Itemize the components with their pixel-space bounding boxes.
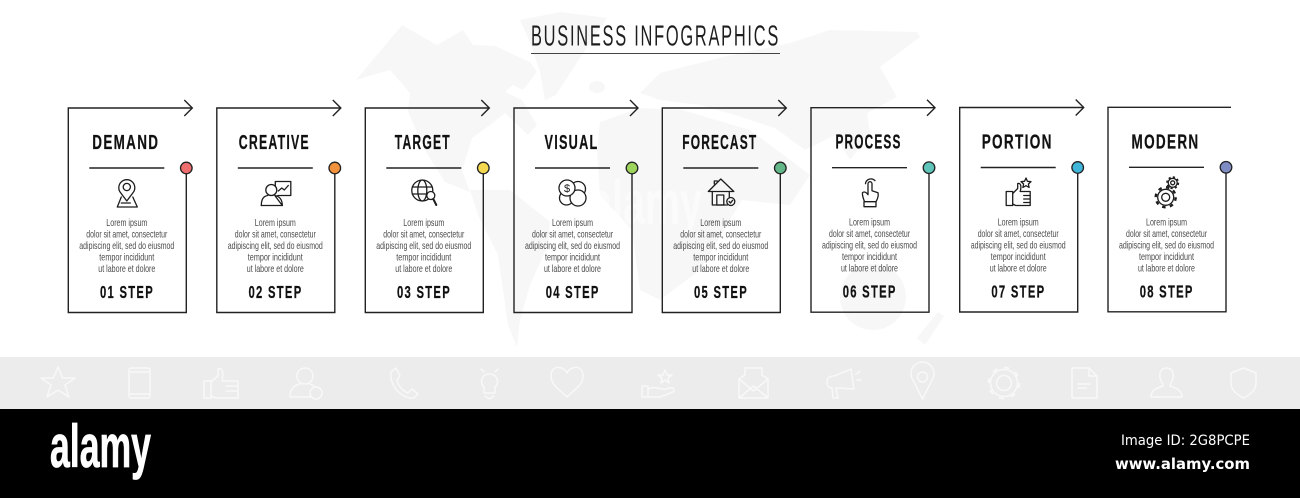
logo: alamy bbox=[50, 413, 151, 480]
panel: step 7 portion: dolor sit amet, consectetur bbox=[978, 228, 1059, 240]
panel: step 8 modern: dolor sit amet, consectetur bbox=[1126, 228, 1207, 240]
panel: step 7 portion: PORTION bbox=[982, 130, 1053, 154]
icon: house bbox=[708, 179, 735, 206]
panel: step 8 modern bbox=[1108, 107, 1232, 312]
panel: step 5 forecast bbox=[662, 100, 786, 312]
panel: step 4 visual: VISUAL bbox=[544, 131, 598, 154]
panel: step 6 process: tempor incididunt bbox=[842, 251, 897, 263]
icon: thumbs up bbox=[204, 369, 238, 398]
panel: step 3 target: ut labore et dolore bbox=[395, 263, 452, 275]
icon: document bbox=[1072, 368, 1097, 398]
panel: step 3 target: dolor sit amet, consectetur bbox=[383, 228, 465, 240]
panel: step 8 modern: tempor incididunt bbox=[1139, 251, 1194, 263]
panel: step 7 portion: 07 STEP bbox=[991, 282, 1045, 302]
panel: step 3 target: Lorem ipsum bbox=[403, 217, 444, 229]
panel: step 2 creative: adipiscing elit, sed do eiusmod bbox=[228, 240, 323, 252]
panel: step 4 visual: adipiscing elit, sed do eiusmod bbox=[525, 240, 620, 252]
panel: step 5 forecast: adipiscing elit, sed do eiusmod bbox=[673, 240, 768, 252]
icon: smartphone bbox=[129, 368, 150, 398]
icon: light bulb bbox=[481, 369, 498, 399]
image id: Image ID: 2G8PCPE bbox=[1121, 433, 1250, 449]
panel: step 2 creative: dolor sit amet, consectetur bbox=[235, 228, 316, 240]
panel: step 1 demand bbox=[68, 100, 192, 312]
icon: telephone bbox=[391, 368, 418, 398]
icon: gears bbox=[1156, 177, 1178, 207]
website: www.alamy.com bbox=[1115, 455, 1250, 473]
icon: location pin bbox=[911, 362, 934, 399]
panel: step 6 process bbox=[811, 100, 935, 312]
panel: step 7 portion: Lorem ipsum bbox=[998, 216, 1039, 228]
panel: step 5 forecast: tempor incididunt bbox=[693, 252, 748, 264]
panel: step 1 demand: DEMAND bbox=[92, 131, 159, 154]
panel: step 1 demand: adipiscing elit, sed do eiusmod bbox=[79, 240, 174, 252]
icon: shield bbox=[1231, 368, 1256, 398]
icon: hand with star bbox=[642, 370, 674, 397]
panel: step 8 modern: ut labore et dolore bbox=[1138, 262, 1195, 274]
panel: step 7 portion: tempor incididunt bbox=[991, 251, 1046, 263]
panel: step 8 modern: adipiscing elit, sed do eiusmod bbox=[1119, 239, 1214, 251]
background world map bbox=[356, 12, 944, 347]
panel: step 3 target: TARGET bbox=[395, 131, 451, 154]
panel: step 7 portion: ut labore et dolore bbox=[990, 262, 1047, 274]
icon: pin hole bbox=[918, 372, 928, 382]
panel: step 5 forecast: FORECAST bbox=[682, 131, 757, 154]
panel: step 4 visual: dolor sit amet, consectetur bbox=[532, 228, 613, 240]
panel: step 2 creative: Lorem ipsum bbox=[255, 217, 296, 229]
panel: step 3 target bbox=[365, 100, 489, 312]
title: BUSINESS INFOGRAPHICS bbox=[531, 20, 780, 52]
panel: step 6 process: ut labore et dolore bbox=[841, 263, 898, 275]
icon: coins bbox=[559, 180, 586, 206]
icon: envelope bbox=[739, 368, 768, 398]
panel: step 3 target: 03 STEP bbox=[397, 282, 451, 302]
panel: step 6 process: PROCESS bbox=[836, 131, 902, 154]
panel: step 5 forecast: ut labore et dolore bbox=[692, 263, 749, 275]
icon: heart bbox=[551, 367, 583, 397]
panel: step 5 forecast: dolor sit amet, consectetur bbox=[680, 228, 762, 240]
icon strip bbox=[0, 357, 1300, 409]
icon: touch hand bbox=[862, 179, 878, 207]
icon: map pin bbox=[117, 180, 137, 207]
panel: step 6 process: Lorem ipsum bbox=[849, 217, 890, 229]
panel: step 7 portion: adipiscing elit, sed do eiusmod bbox=[971, 240, 1066, 252]
panel: step 3 target: adipiscing elit, sed do eiusmod bbox=[376, 240, 471, 252]
icon: presenter with chart bbox=[261, 182, 291, 206]
panel: step 6 process: adipiscing elit, sed do eiusmod bbox=[822, 240, 917, 252]
panel: step 2 creative: 02 STEP bbox=[249, 282, 303, 302]
icon: coins: $ bbox=[564, 183, 570, 195]
panel: step 8 modern: 08 STEP bbox=[1140, 281, 1194, 301]
panel: step 2 creative: ut labore et dolore bbox=[247, 263, 304, 275]
panel: step 4 visual: Lorem ipsum bbox=[552, 217, 593, 229]
panel: step 6 process: dolor sit amet, consectetur bbox=[829, 228, 910, 240]
icon: globe search bbox=[412, 180, 436, 205]
panel: step 2 creative bbox=[217, 100, 341, 312]
icon: megaphone bbox=[827, 369, 861, 398]
panel: step 5 forecast: Lorem ipsum bbox=[700, 217, 741, 229]
icon: user badge bbox=[310, 387, 322, 399]
panel: step 1 demand: 01 STEP bbox=[100, 282, 154, 302]
panel: step 4 visual: 04 STEP bbox=[546, 282, 600, 302]
panel: step 4 visual bbox=[514, 100, 638, 312]
icon: gear bbox=[988, 368, 1020, 398]
panel: step 5 forecast: 05 STEP bbox=[694, 282, 748, 302]
panel: step 8 modern: MODERN bbox=[1132, 130, 1200, 153]
panel: step 1 demand: ut labore et dolore bbox=[98, 263, 155, 275]
panel: step 4 visual: ut labore et dolore bbox=[544, 263, 601, 275]
panel: step 6 process: 06 STEP bbox=[843, 282, 897, 302]
panel: step 7 portion bbox=[960, 100, 1084, 312]
panel: step 1 demand: dolor sit amet, consectetur bbox=[86, 228, 168, 240]
icon: user with check bbox=[290, 368, 314, 397]
panel: step 4 visual: tempor incididunt bbox=[545, 252, 600, 264]
icon: thumbs up with star bbox=[1006, 178, 1031, 206]
footer bar bbox=[0, 409, 1300, 498]
panel: step 2 creative: CREATIVE bbox=[239, 131, 310, 154]
panel: step 1 demand: Lorem ipsum bbox=[106, 217, 147, 229]
panel: step 1 demand: tempor incididunt bbox=[99, 252, 154, 264]
icon: star bbox=[41, 367, 75, 397]
panel: step 3 target: tempor incididunt bbox=[396, 252, 451, 264]
watermark: alamy bbox=[590, 169, 702, 238]
panel: step 8 modern: Lorem ipsum bbox=[1146, 216, 1187, 228]
icon: person bbox=[1151, 368, 1182, 397]
panel: step 2 creative: tempor incididunt bbox=[248, 252, 303, 264]
